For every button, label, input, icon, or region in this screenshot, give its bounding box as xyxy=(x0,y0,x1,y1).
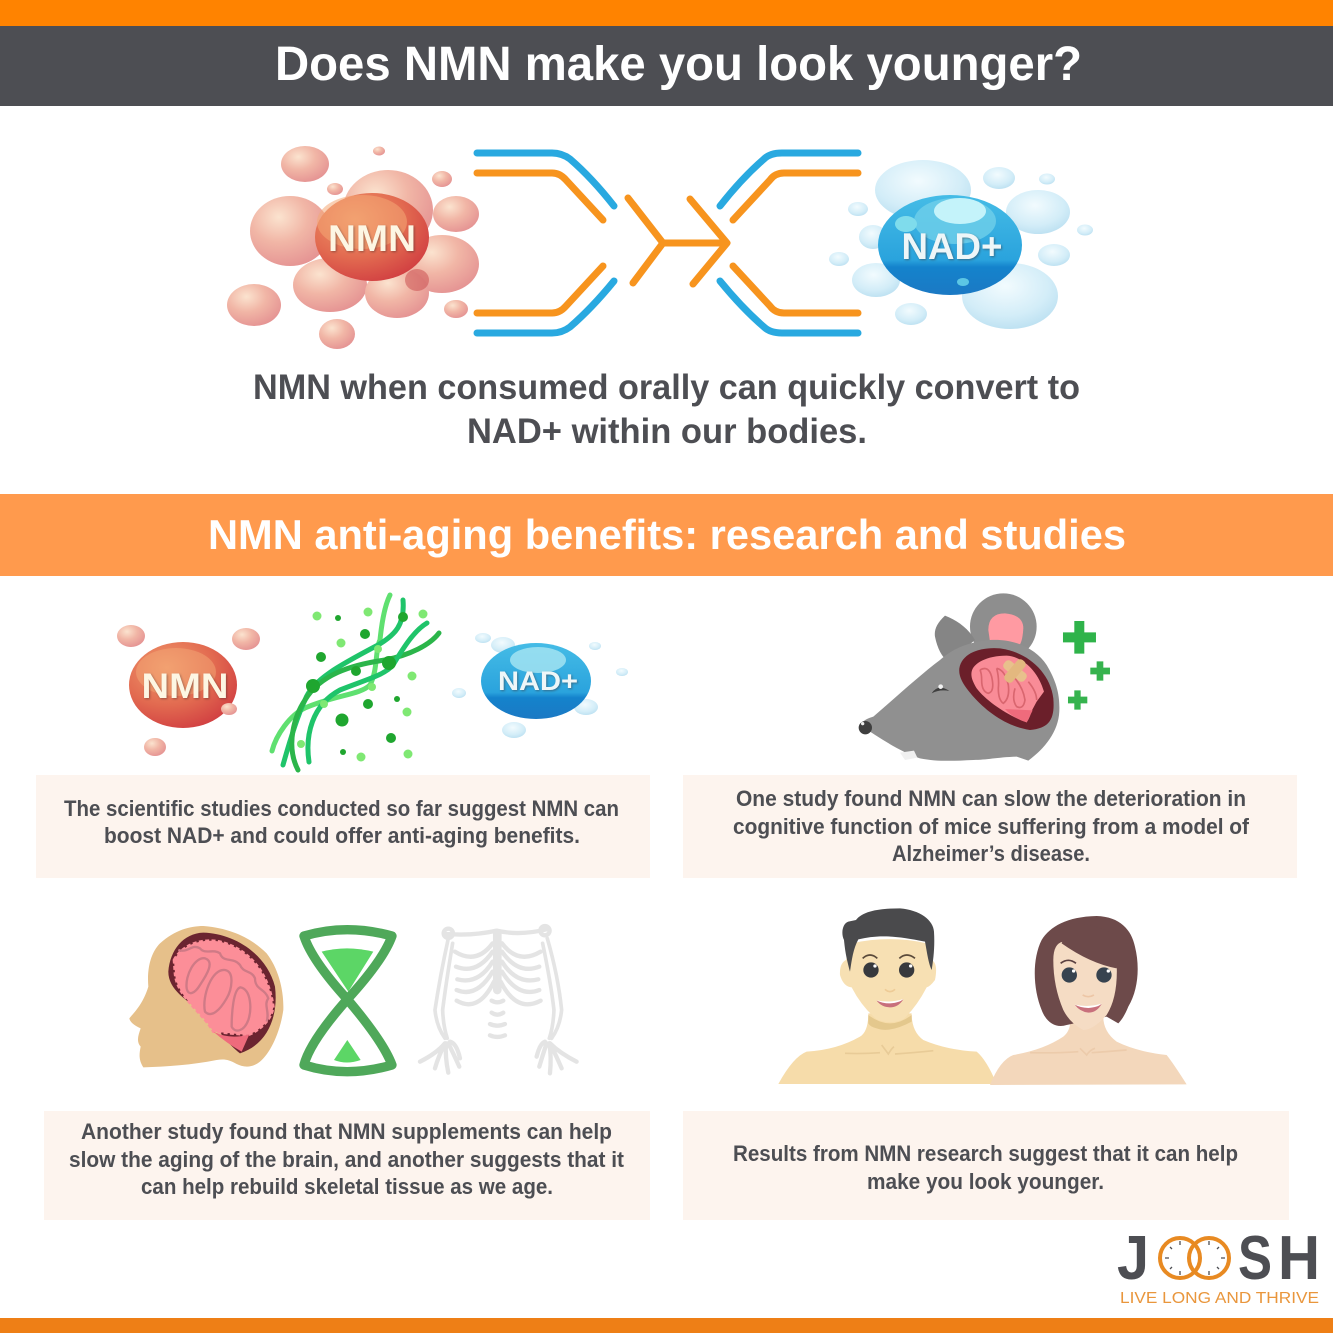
icon: head with brain xyxy=(129,926,283,1067)
icon: small NMN bubbles: NMN xyxy=(142,667,228,706)
icon: NMN bubble cluster xyxy=(227,146,479,349)
panel: text card 3 xyxy=(44,1111,650,1220)
panel: text card 3: Another study found that NMN supplements can help xyxy=(81,1119,612,1144)
intro text: NAD+ within our bodies. xyxy=(467,412,867,451)
panel: text card 4: Results from NMN research suggest that it can help xyxy=(733,1141,1238,1166)
panel: text card 2: One study found NMN can slow the deterioration in xyxy=(736,786,1246,811)
intro text xyxy=(253,368,1080,451)
top orange band xyxy=(0,0,1333,26)
woman xyxy=(990,916,1187,1085)
icon: small NAD+ bubbles: NAD+ xyxy=(498,666,578,696)
logo: JOOSH xyxy=(1117,1224,1320,1307)
panel: text card 4 xyxy=(683,1111,1289,1220)
panel: text card 1: boost NAD+ and could offer anti-aging benefits. xyxy=(104,823,580,848)
panel: text card 4: make you look younger. xyxy=(867,1169,1104,1194)
section heading: NMN anti-aging benefits: research and studies xyxy=(208,511,1126,558)
logo: JOOSH: J xyxy=(1117,1224,1149,1293)
icon: skeleton xyxy=(420,926,577,1073)
logo: JOOSH: S xyxy=(1238,1224,1272,1293)
icon: green fibres and particles xyxy=(272,595,439,770)
panel: text card 2 xyxy=(683,775,1297,878)
icon: small NAD+ bubbles xyxy=(452,633,628,738)
title bar xyxy=(0,26,1333,106)
icon: mouse with brain xyxy=(859,593,1110,761)
panel: text card 2: Alzheimer’s disease. xyxy=(892,841,1090,866)
panel: text card 2: cognitive function of mice suffering from a model of xyxy=(733,814,1250,839)
arrow: central orange arrow xyxy=(628,198,727,284)
panel: text card 1 xyxy=(36,775,650,878)
arrow: right diverging lines xyxy=(720,153,858,333)
bottom orange band xyxy=(0,1318,1333,1333)
icon: NAD+ bubble cluster xyxy=(829,160,1093,329)
panel: NMN boosts NAD+ illustration xyxy=(117,595,628,770)
icon: young man and woman xyxy=(778,908,1187,1085)
arrow: left converging lines xyxy=(477,153,614,333)
icon: hourglass xyxy=(304,930,392,1072)
label: NAD+: NAD+ xyxy=(902,226,1002,267)
logo: JOOSH: H xyxy=(1278,1224,1320,1293)
man xyxy=(778,908,997,1084)
intro text: NMN when consumed orally can quickly convert to xyxy=(253,368,1080,407)
logo: JOOSH: LIVE LONG AND THRIVE xyxy=(1120,1290,1319,1307)
panel: text card 3: can help rebuild skeletal tissue as we age. xyxy=(141,1174,553,1199)
icon: small NMN bubbles xyxy=(117,625,260,756)
panel: text card 1: The scientific studies conducted so far suggest NMN can xyxy=(64,796,619,821)
label: NMN: NMN xyxy=(328,218,416,259)
panel: text card 3: slow the aging of the brain, and another suggests that it xyxy=(69,1147,625,1172)
section heading xyxy=(0,494,1333,576)
title bar: Does NMN make you look younger? xyxy=(275,38,1082,91)
